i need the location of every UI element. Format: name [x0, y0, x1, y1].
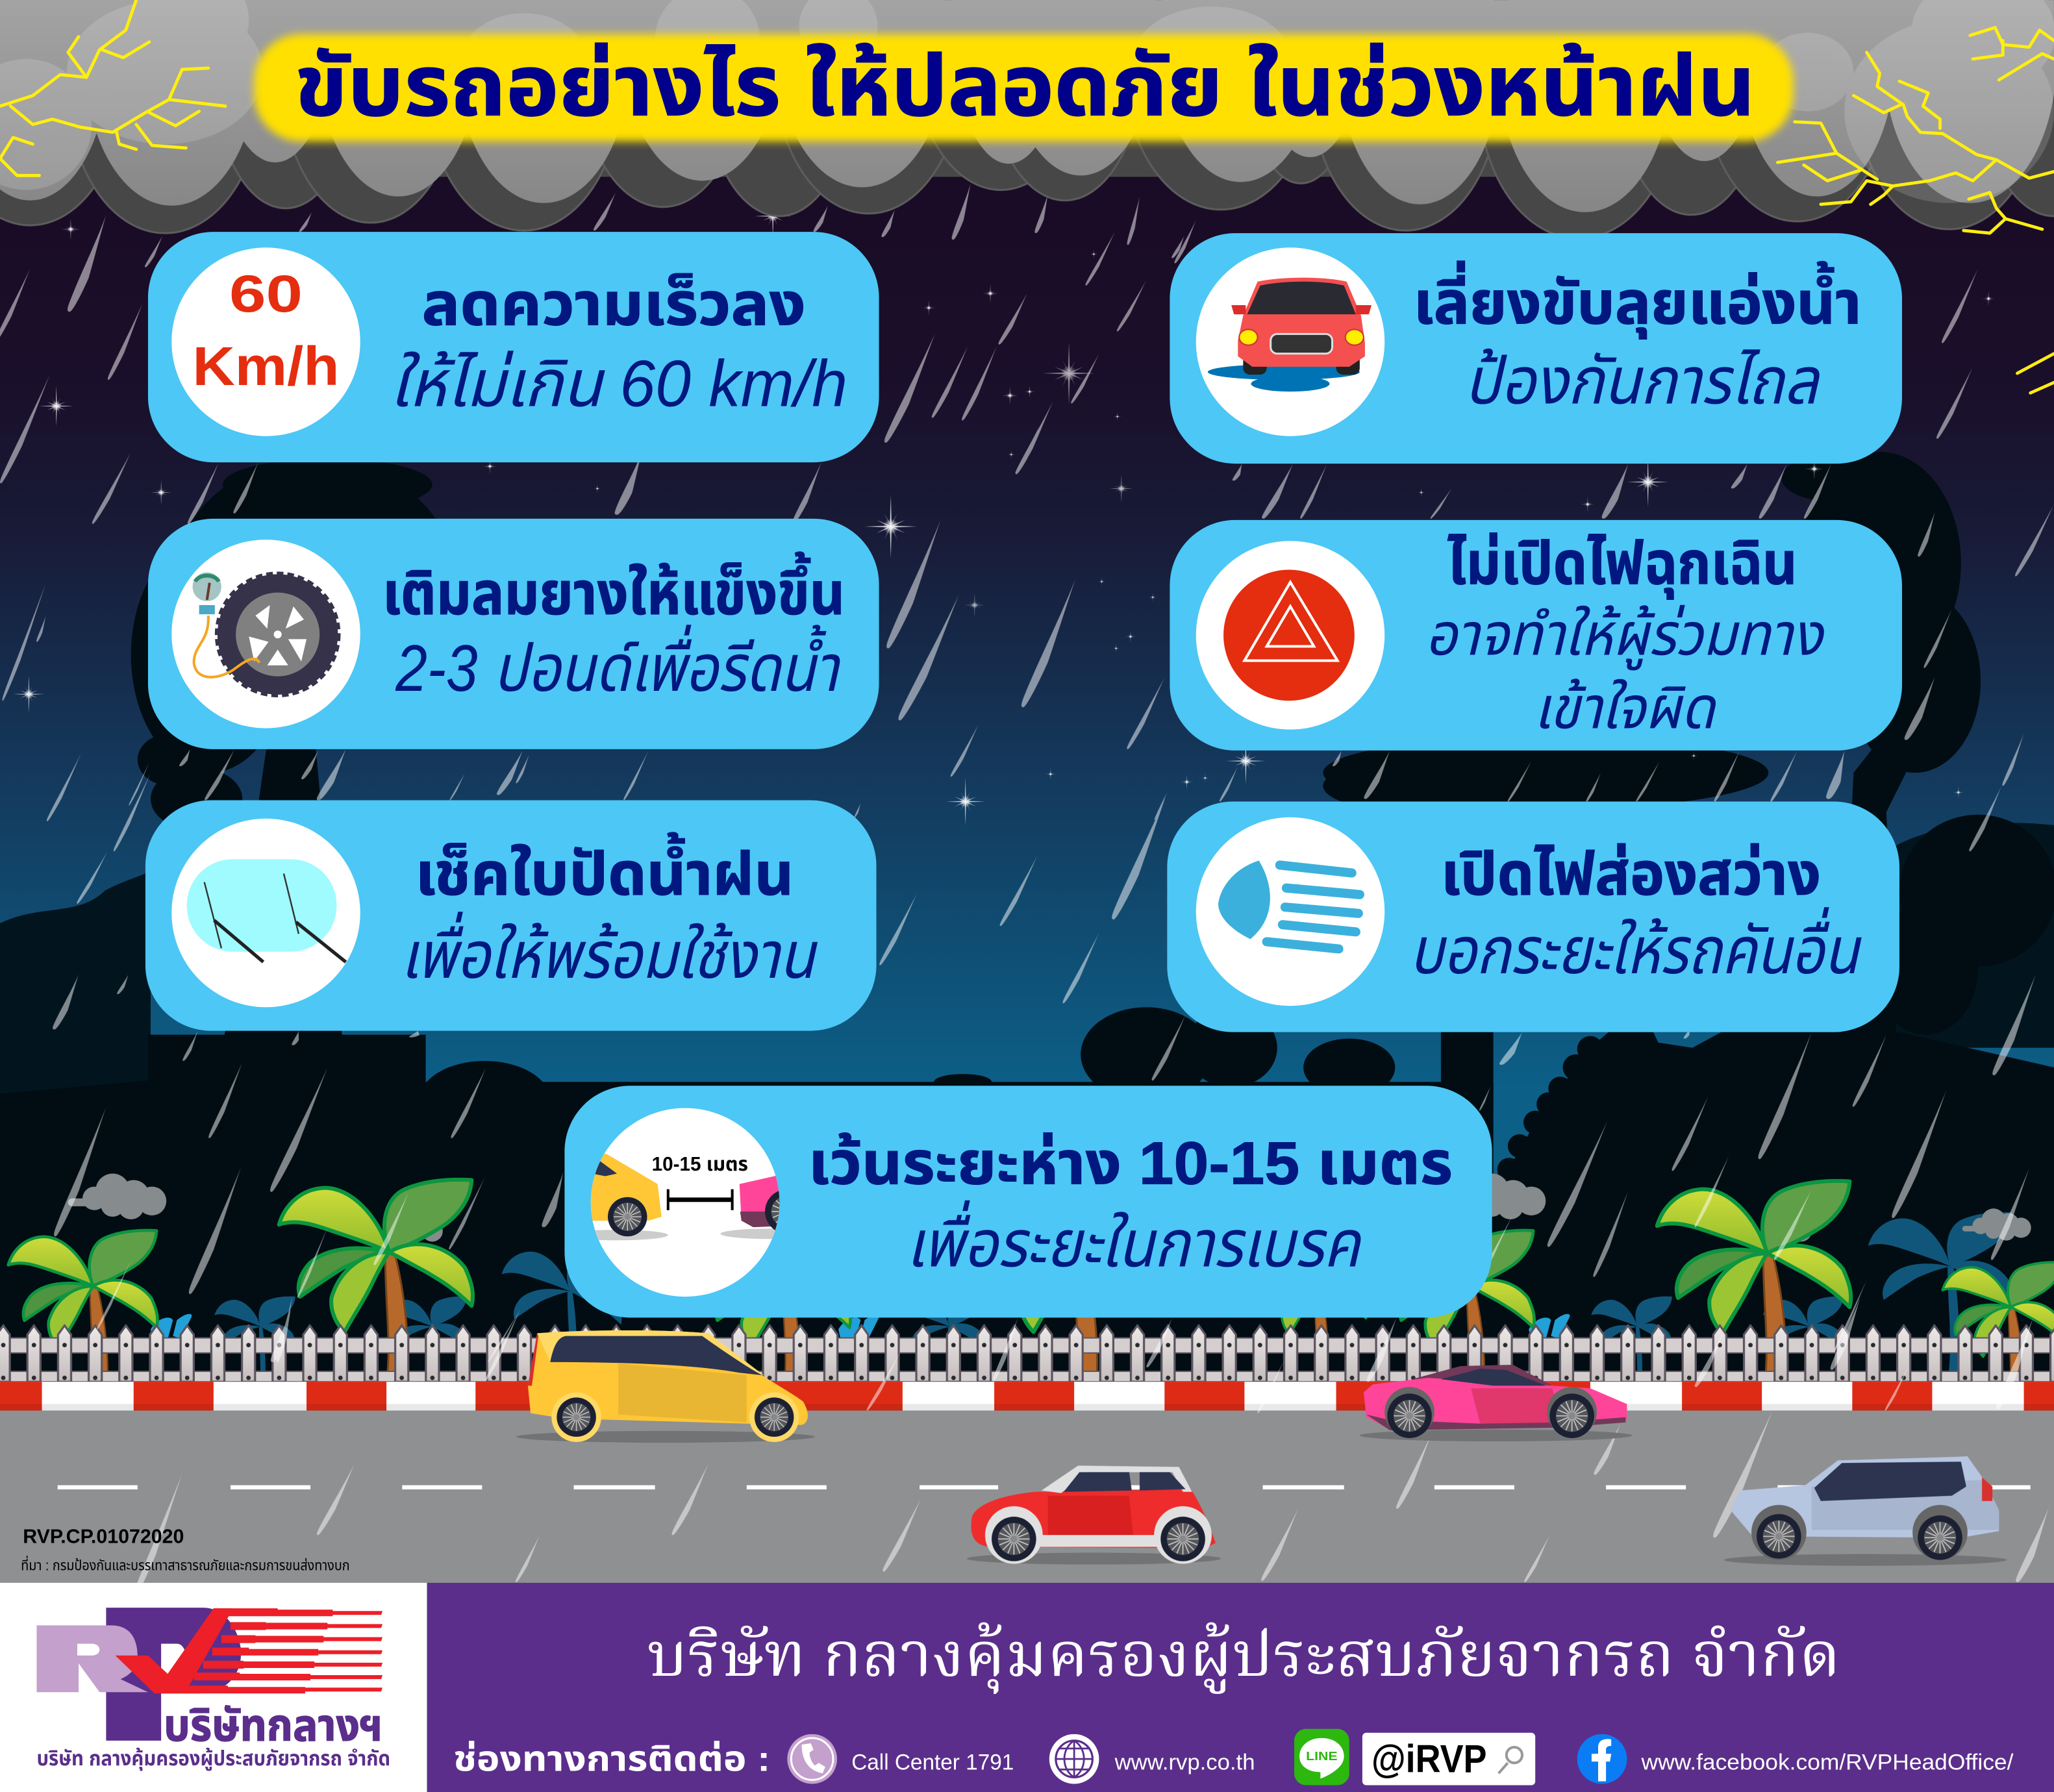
- contact label: ช่องทางการติดต่อ :: [453, 1739, 770, 1778]
- description line 2: เข้าใจผิด: [1534, 676, 1716, 741]
- logo: short name: บริษัทกลางฯ: [164, 1700, 382, 1750]
- heading: เช็คใบปัดน้ำฝน: [415, 832, 794, 908]
- panel: hazard lights: [1170, 520, 1902, 751]
- road: [0, 1411, 2054, 1584]
- logo: full name: บริษัท กลางคุ้มครองผู้ประสบภัยจากรถ จำกัด: [36, 1747, 390, 1771]
- lightning bolts: [0, 0, 2054, 393]
- icon: two cars with gap: [563, 1108, 825, 1297]
- panel: avoid puddles: [1170, 233, 1902, 464]
- storm clouds: [0, 0, 2054, 238]
- heading: เลี่ยงขับลุยแอ่งน้ำ: [1414, 260, 1861, 339]
- heading: เว้นระยะห่าง 10-15 เมตร: [808, 1130, 1453, 1197]
- LINE id box: [1362, 1733, 1535, 1785]
- icon: LINE: LINE: [1306, 1750, 1338, 1763]
- icon: 60 km/h: [171, 247, 360, 436]
- small grey clouds: [68, 1173, 2031, 1241]
- vehicle: red mini car: [967, 1465, 1221, 1565]
- red and white curb: [0, 1382, 2054, 1411]
- website: www.rvp.co.th: [1114, 1750, 1255, 1774]
- title text: ขับรถอย่างไร ให้ปลอดภัย ในช่วงหน้าฝน: [295, 38, 1755, 134]
- icon: phone: [787, 1734, 837, 1784]
- LINE id box: @iRVP: [1371, 1736, 1487, 1780]
- description: เพื่อให้พร้อมใช้งาน: [401, 912, 818, 992]
- icon: two cars with gap: 10-15 เมตร: [652, 1154, 748, 1175]
- panel: following distance: [563, 1086, 1492, 1317]
- icon: hazard triangle: [1196, 541, 1384, 730]
- facebook url: www.facebook.com/RVPHeadOffice/: [1641, 1750, 2014, 1774]
- description: 2-3 ปอนด์เพื่อรีดน้ำ: [395, 625, 841, 705]
- panel: reduce speed: [148, 232, 879, 462]
- panel: wipers: [145, 801, 877, 1031]
- heading: เปิดไฟส่องสว่าง: [1441, 840, 1821, 908]
- vehicle: silver SUV: [1724, 1456, 2007, 1566]
- picket fence: [0, 1324, 2054, 1383]
- background: night sky gradient: [0, 0, 2054, 1415]
- blue background palms: [151, 1212, 2013, 1388]
- icon: Facebook: [1577, 1734, 1627, 1784]
- heading: ลดความเร็วลง: [422, 270, 806, 338]
- logo panel: [0, 1583, 427, 1792]
- description: บอกระยะให้รถคันอื่น: [1410, 907, 1862, 988]
- logo: RVP mark: [36, 1608, 382, 1741]
- panel: headlights: [1167, 802, 1899, 1032]
- footer panel: [427, 1583, 2054, 1792]
- title banner: [254, 34, 1794, 142]
- description: ให้ไม่เกิน 60 km/h: [390, 347, 847, 420]
- icon: 60 km/h: Km/h: [193, 335, 339, 397]
- vehicle: pink sports car: [1360, 1365, 1632, 1441]
- call center: Call Center 1791: [851, 1750, 1014, 1774]
- vehicle: yellow van: [516, 1330, 815, 1443]
- company name: บริษัท กลางคุ้มครองผู้ประสบภัยจากรถ จำกัด: [647, 1610, 1840, 1709]
- source note: ที่มา : กรมป้องกันและบรรเทาสาธารณภัยและกรมการขนส่งทางบก: [21, 1556, 350, 1574]
- description: เพื่อระยะในการเบรค: [907, 1201, 1362, 1281]
- icon: windscreen wipers: [171, 819, 360, 1007]
- icon: car in puddle: [1196, 247, 1384, 436]
- icon: globe: [1049, 1734, 1099, 1784]
- description line 1: อาจทำให้ผู้ร่วมทาง: [1425, 603, 1825, 671]
- icon: LINE: [1294, 1729, 1349, 1785]
- stars: [13, 194, 1995, 825]
- rain drops: [0, 183, 2054, 1598]
- description: ป้องกันการไถล: [1464, 345, 1820, 417]
- tree silhouettes: [0, 452, 2054, 1388]
- heading: เติมลมยางให้แข็งขึ้น: [382, 551, 845, 627]
- icon: headlight beam: [1196, 817, 1384, 1006]
- panel: tyre pressure: [148, 519, 879, 749]
- icon: 60 km/h: 60: [229, 265, 303, 323]
- palm trees: [8, 1180, 2054, 1388]
- document code: RVP.CP.01072020: [23, 1526, 184, 1547]
- heading: ไม่เปิดไฟฉุกเฉิน: [1447, 530, 1797, 600]
- icon: tyre and gauge: [171, 540, 360, 728]
